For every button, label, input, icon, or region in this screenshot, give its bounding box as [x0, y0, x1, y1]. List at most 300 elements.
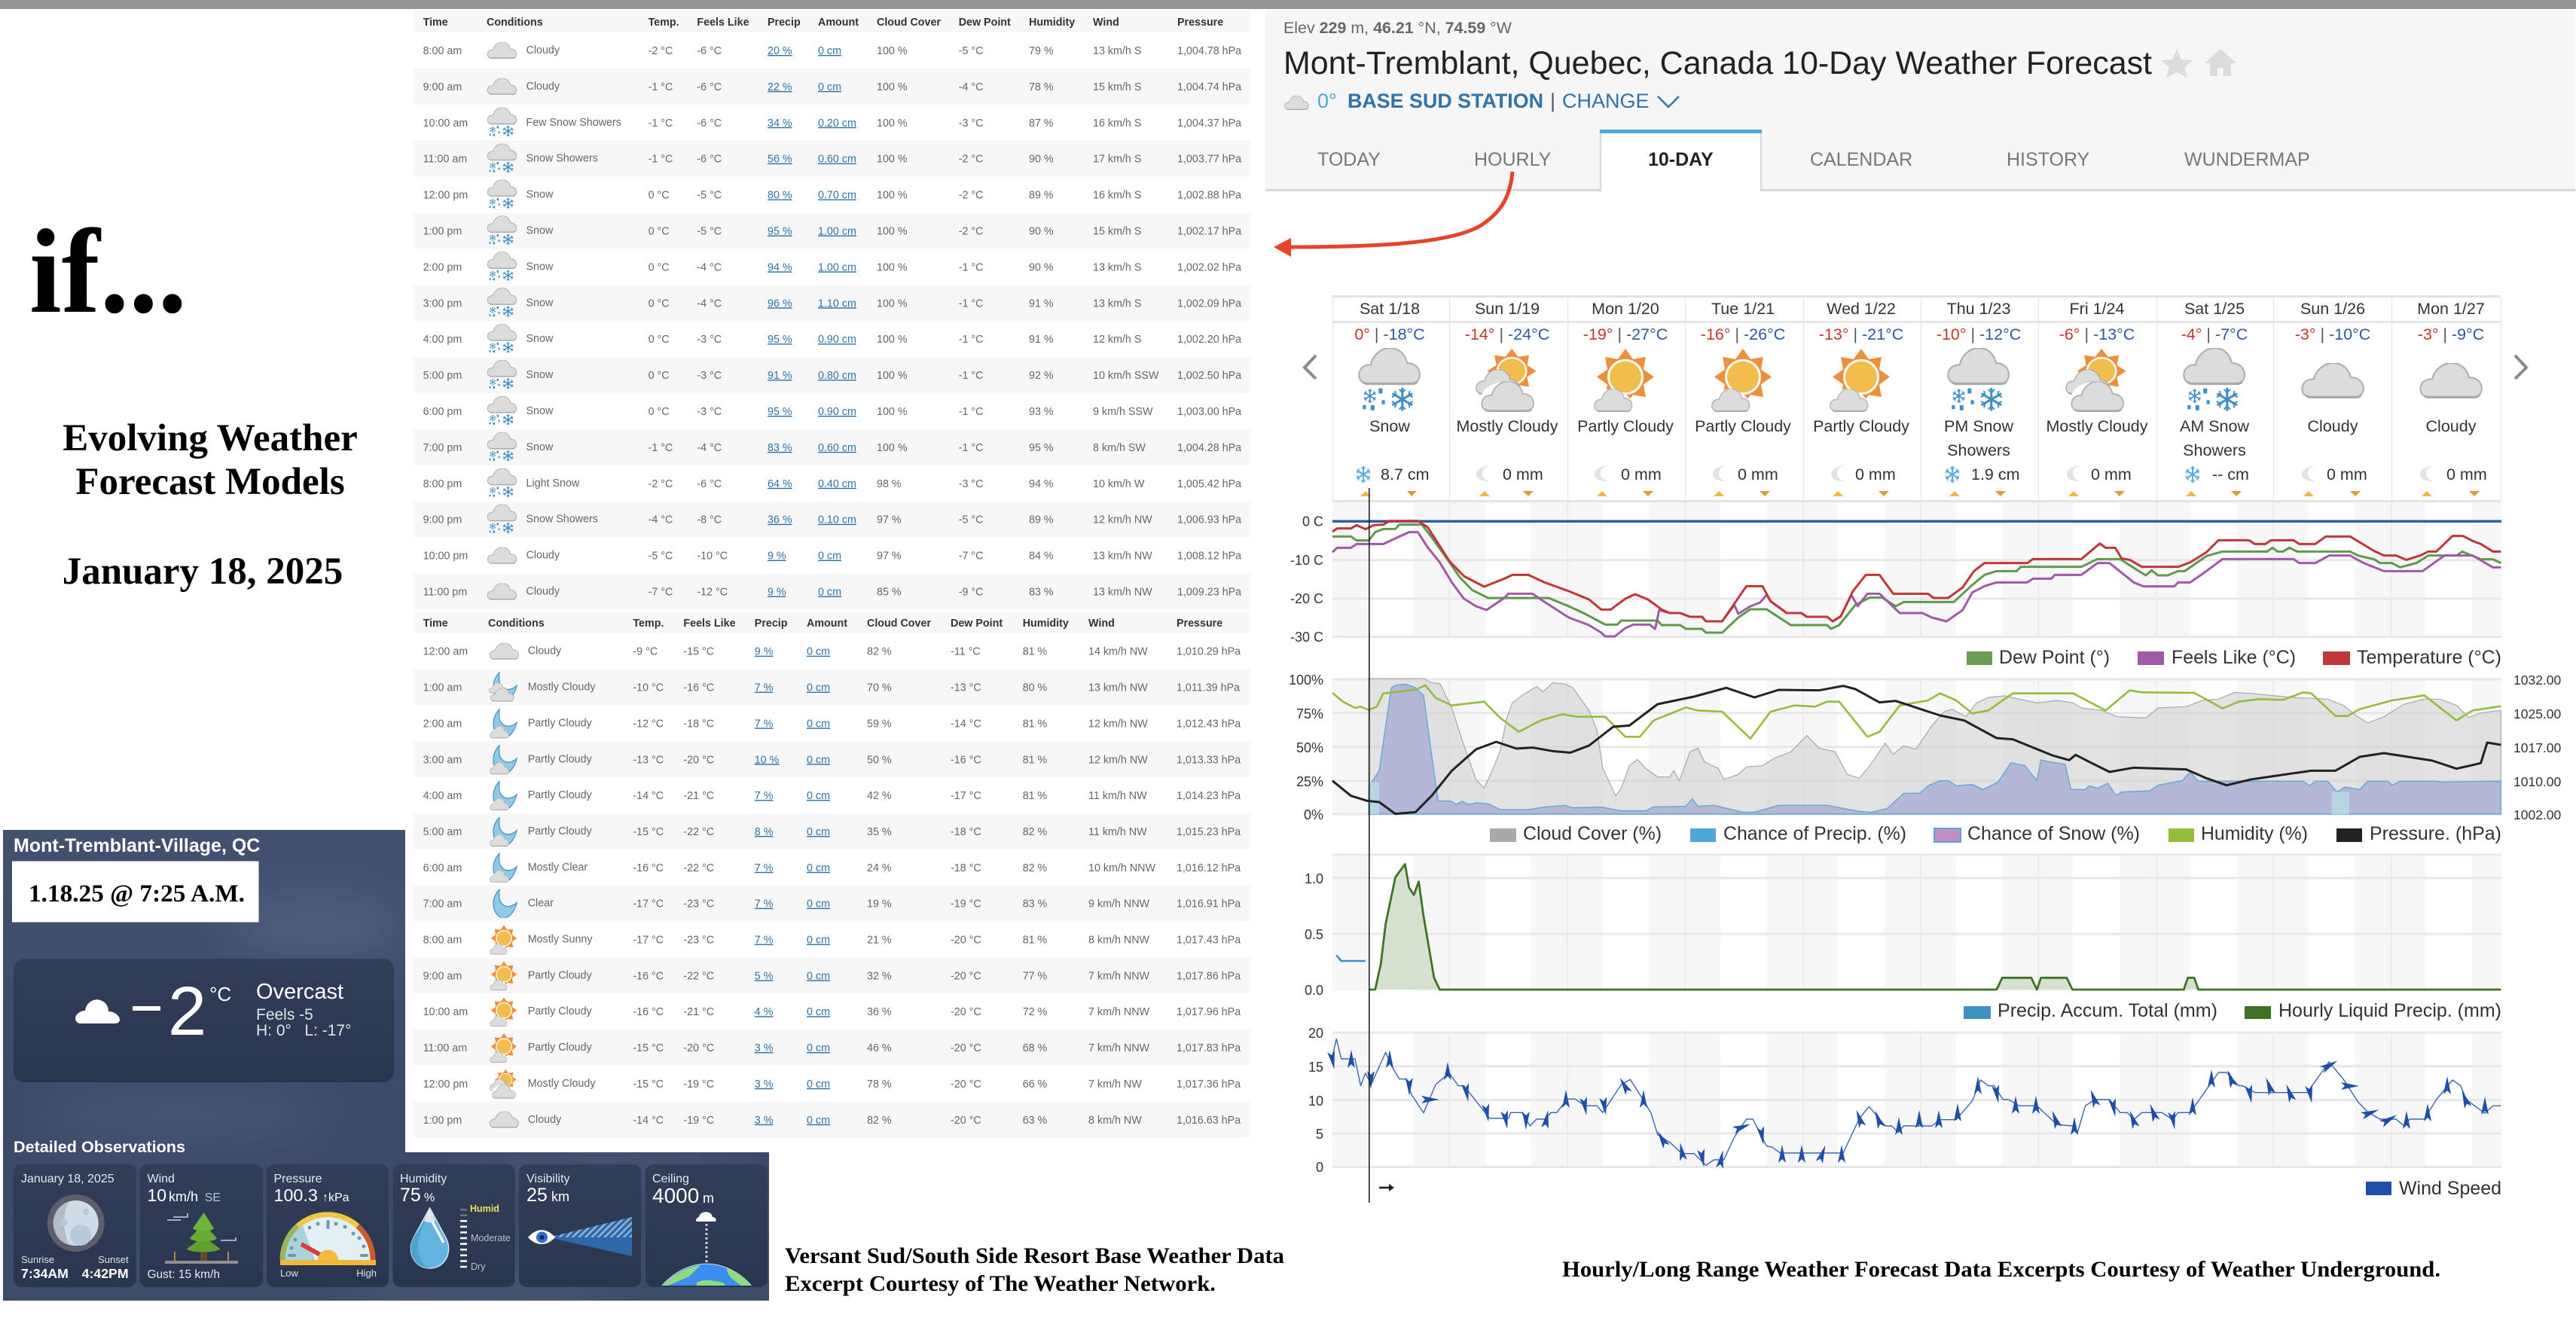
- row 10:00 pm: -10 °C: [697, 551, 728, 563]
- row 8:00 am: -17 °C: [633, 934, 664, 946]
- axis labels left: 25%: [1296, 774, 1323, 789]
- row 8:00 am: Mostly Sunny: [528, 934, 593, 946]
- row 4:00 pm: Snow: [526, 333, 554, 345]
- row 5:00 am: [414, 813, 1250, 850]
- forecast: Fri 1/24: -6° | -13°C: [2059, 325, 2135, 343]
- forecast: Fri 1/24: Mostly Cloudy: [2046, 417, 2148, 435]
- row 8:00 am: 8 km/h NNW: [1088, 934, 1150, 946]
- axis labels: 0.5: [1305, 927, 1323, 942]
- panel: current temperature card: [14, 959, 394, 1082]
- row 1:00 pm: [414, 212, 1250, 249]
- row 12:00 pm: -15 °C: [633, 1078, 664, 1091]
- row 3:00 pm: -1 °C: [959, 297, 983, 310]
- row 2:00 pm: 13 km/h S: [1093, 261, 1141, 273]
- card: humidity: Humidity: [400, 1173, 447, 1185]
- row 7:00 pm: 83 %: [768, 442, 792, 454]
- panel: hourly table today: [414, 11, 1250, 609]
- row 5:00 am: 0 cm: [807, 826, 830, 838]
- row 3:00 pm: 96 %: [768, 297, 792, 310]
- axis labels: 15: [1308, 1060, 1323, 1075]
- row 9:00 am: 100 %: [877, 81, 908, 93]
- row 1:00 pm: 0 °C: [649, 226, 670, 238]
- row 12:00 pm: Mostly Cloudy: [528, 1078, 596, 1090]
- legend: Hourly Liquid Precip. (mm): [2278, 1000, 2501, 1021]
- table header row: Dew Point: [951, 618, 1003, 630]
- row 10:00 am: 72 %: [1023, 1006, 1048, 1018]
- table header row: Pressure: [1177, 17, 1223, 29]
- row 12:00 am: -15 °C: [683, 646, 714, 658]
- row 5:00 pm: 1,002.50 hPa: [1177, 370, 1241, 382]
- row 7:00 pm: -1 °C: [959, 442, 983, 454]
- row 7:00 pm: 7:00 pm: [423, 442, 462, 454]
- row 1:00 pm: 63 %: [1023, 1115, 1048, 1127]
- row 3:00 am: -20 °C: [683, 754, 714, 766]
- row 1:00 am: [414, 670, 1250, 705]
- row 10:00 pm: -7 °C: [959, 551, 983, 563]
- card: date and moon: [14, 1164, 136, 1287]
- row 4:00 am: 81 %: [1023, 790, 1048, 802]
- row 5:00 pm: 92 %: [1029, 370, 1054, 382]
- forecast: Sat 1/18: [1354, 300, 1430, 496]
- row 9:00 am: 9:00 am: [423, 81, 462, 93]
- row 3:00 am: [414, 741, 1250, 777]
- row 11:00 am: [414, 141, 1250, 177]
- row 11:00 pm: 11:00 pm: [423, 586, 467, 598]
- icon: pressure gauge: [280, 1215, 376, 1265]
- row 4:00 pm: 95 %: [768, 334, 792, 346]
- temperature reading: °C: [209, 983, 231, 1005]
- row 8:00 am: 1,017.43 hPa: [1177, 934, 1241, 946]
- row 11:00 am: -6 °C: [697, 154, 722, 166]
- row 8:00 pm: 64 %: [768, 478, 792, 490]
- row 9:00 am: 32 %: [867, 970, 892, 982]
- caption: forecast data credit: Hourly/Long Range Weather Forecast Data Excerpts Courtesy of Weather Underground.: [1562, 1257, 2440, 1282]
- row 10:00 pm: 84 %: [1029, 551, 1054, 563]
- card: wind: Wind: [148, 1173, 175, 1185]
- row 1:00 am: 80 %: [1023, 682, 1048, 694]
- row 8:00 am: -23 °C: [683, 934, 714, 946]
- row 4:00 am: -14 °C: [633, 790, 664, 802]
- row 9:00 am: Cloudy: [526, 81, 560, 93]
- row 1:00 pm: 1:00 pm: [423, 1115, 462, 1127]
- panel: hourly table next day: [414, 612, 1250, 1138]
- row 5:00 pm: 0.80 cm: [818, 370, 856, 382]
- forecast: Wed 1/22: -13° | -21°C: [1819, 325, 1903, 343]
- row 4:00 am: 4:00 am: [423, 790, 462, 802]
- row 8:00 am: -20 °C: [951, 934, 981, 946]
- row 1:00 am: Mostly Cloudy: [528, 682, 596, 694]
- row 2:00 am: -14 °C: [951, 718, 981, 730]
- row 11:00 am: 46 %: [867, 1042, 892, 1054]
- table header row: [414, 612, 1250, 633]
- navigation tabs: HOURLY: [1474, 149, 1552, 170]
- icon: tree with wind: [165, 1213, 238, 1264]
- row 9:00 pm: 89 %: [1029, 514, 1054, 526]
- table header row: Conditions: [488, 618, 545, 630]
- row 11:00 am: -2 °C: [959, 154, 983, 166]
- row 7:00 pm: 1,004.28 hPa: [1177, 442, 1241, 454]
- forecast: Tue 1/21: 0 mm: [1738, 465, 1778, 483]
- row 5:00 pm: 0 °C: [649, 370, 670, 382]
- navigation tabs: TODAY: [1317, 149, 1381, 170]
- row 3:00 pm: 13 km/h S: [1093, 297, 1141, 310]
- row 6:00 pm: 1,003.00 hPa: [1177, 406, 1241, 418]
- card: humidity: Humid: [470, 1203, 499, 1214]
- axis labels: [1290, 514, 1323, 645]
- row 3:00 am: Partly Cloudy: [528, 753, 593, 765]
- current time marker line: [1369, 488, 1370, 1203]
- table header row: Precip: [768, 17, 801, 29]
- legend: Chance of Precip. (%): [1723, 823, 1906, 844]
- row 10:00 am: 36 %: [867, 1006, 892, 1018]
- forecast: Fri 1/24: Fri 1/24: [2070, 300, 2124, 318]
- row 8:00 am: 8:00 am: [423, 45, 462, 57]
- table header row: Wind: [1093, 17, 1119, 29]
- legend: Dew Point (°): [1999, 647, 2110, 668]
- row 2:00 am: -12 °C: [633, 718, 664, 730]
- row 7:00 am: 7 %: [755, 898, 774, 911]
- forecast: Wed 1/22: [1813, 300, 1909, 496]
- row 8:00 am: 13 km/h S: [1093, 45, 1141, 57]
- row 1:00 pm: -14 °C: [633, 1115, 664, 1127]
- row 2:00 pm: 1,002.02 hPa: [1177, 261, 1241, 273]
- row 8:00 am: 79 %: [1029, 45, 1054, 57]
- row 10:00 am: 0 cm: [807, 1006, 830, 1018]
- row 9:00 am: -22 °C: [683, 970, 714, 982]
- card: date and moon: 7:34AM: [21, 1266, 69, 1281]
- row 4:00 am: -17 °C: [951, 790, 981, 802]
- row 9:00 am: 0 cm: [807, 970, 830, 982]
- card: wind: 10: [148, 1185, 166, 1205]
- card: wind: km/h: [169, 1189, 198, 1204]
- row 9:00 pm: Snow Showers: [526, 514, 598, 526]
- row 5:00 am: Partly Cloudy: [528, 825, 593, 837]
- row 5:00 pm: -1 °C: [959, 370, 983, 382]
- row 11:00 am: -20 °C: [683, 1042, 714, 1054]
- card: pressure: High: [356, 1267, 377, 1279]
- row 11:00 am: 7 km/h NNW: [1088, 1042, 1150, 1054]
- row 11:00 am: 0.60 cm: [818, 154, 856, 166]
- condition text: [256, 980, 352, 1039]
- row 4:00 am: 11 km/h NW: [1088, 790, 1147, 802]
- row 7:00 am: [414, 886, 1250, 922]
- forecast: Sun 1/26: Sun 1/26: [2300, 300, 2365, 318]
- row 3:00 pm: [414, 285, 1250, 321]
- axis labels: -10 C: [1290, 553, 1323, 568]
- navigation tabs: [1317, 130, 2310, 191]
- row 9:00 am: 1,004.74 hPa: [1177, 81, 1241, 93]
- row 4:00 am: -21 °C: [683, 790, 714, 802]
- row 10:00 am: -21 °C: [683, 1006, 714, 1018]
- row 10:00 pm: 97 %: [877, 551, 902, 563]
- row 12:00 pm: 0.70 cm: [818, 190, 856, 202]
- row 5:00 pm: -3 °C: [697, 370, 722, 382]
- row 12:00 pm: -19 °C: [683, 1078, 714, 1091]
- chart: wind speed: [1308, 1026, 2501, 1199]
- row 9:00 am: 7 km/h NNW: [1088, 970, 1150, 982]
- row 7:00 pm: 0.60 cm: [818, 442, 856, 454]
- row 10:00 am: [423, 997, 1241, 1027]
- forecast: Mon 1/20: -19° | -27°C: [1583, 325, 1668, 343]
- row 9:00 am: -6 °C: [697, 81, 722, 93]
- card: pressure: 100.3: [274, 1185, 318, 1205]
- axis labels right: 1002.00: [2513, 807, 2562, 822]
- row 7:00 am: -19 °C: [951, 898, 981, 911]
- row 8:00 pm: 0.40 cm: [818, 478, 856, 490]
- row 10:00 am: -3 °C: [959, 117, 983, 130]
- title block: Evolving Weather: [63, 417, 358, 459]
- row 7:00 am: 7:00 am: [423, 898, 462, 911]
- forecast: Sat 1/25: Sat 1/25: [2184, 300, 2245, 318]
- row 2:00 pm: -1 °C: [959, 261, 983, 273]
- row 12:00 am: -9 °C: [633, 646, 658, 658]
- card: ceiling: [646, 1164, 768, 1287]
- row 9:00 am: [414, 957, 1250, 993]
- row 2:00 pm: [423, 252, 1241, 281]
- row 11:00 am: 100 %: [877, 154, 908, 166]
- axis labels left: 75%: [1296, 706, 1323, 721]
- forecast: Sat 1/25: -- cm: [2212, 465, 2249, 483]
- row 10:00 pm: [423, 548, 1241, 563]
- row 10:00 pm: 13 km/h NW: [1093, 551, 1152, 563]
- row 7:00 am: 83 %: [1023, 898, 1048, 911]
- row 4:00 am: 0 cm: [807, 790, 830, 802]
- forecast: Tue 1/21: [1695, 300, 1791, 496]
- row 11:00 am: Snow Showers: [526, 153, 598, 165]
- row 6:00 pm: 93 %: [1029, 406, 1054, 418]
- station selector: |: [1550, 90, 1555, 112]
- row 1:00 pm: -5 °C: [697, 226, 722, 238]
- forecast: Sat 1/25: [2180, 300, 2249, 496]
- row 12:00 pm: 3 %: [755, 1078, 774, 1091]
- row 11:00 am: -20 °C: [951, 1042, 981, 1054]
- row 1:00 am: -10 °C: [633, 682, 664, 694]
- row 9:00 pm: -4 °C: [649, 514, 673, 526]
- row 3:00 pm: 1,002.09 hPa: [1177, 297, 1241, 310]
- row 12:00 am: 1,010.29 hPa: [1177, 646, 1241, 658]
- forecast: Fri 1/24: [2046, 300, 2148, 496]
- row 4:00 pm: 91 %: [1029, 334, 1054, 346]
- row 4:00 pm: 1,002.20 hPa: [1177, 334, 1241, 346]
- forecast: Wed 1/22: Partly Cloudy: [1813, 417, 1909, 435]
- row 5:00 am: -15 °C: [633, 826, 664, 838]
- row 8:00 pm: 94 %: [1029, 478, 1054, 490]
- axis labels right: [2513, 673, 2562, 822]
- row 12:00 pm: 100 %: [877, 190, 908, 202]
- row 1:00 pm: -20 °C: [951, 1115, 981, 1127]
- table header row: Dew Point: [959, 17, 1011, 29]
- row 2:00 pm: 1.00 cm: [818, 261, 856, 273]
- row 3:00 pm: -4 °C: [697, 297, 722, 310]
- top grey bar: [0, 0, 2576, 9]
- row 11:00 am: 17 km/h S: [1093, 154, 1141, 166]
- row 10:00 am: 10:00 am: [423, 117, 468, 130]
- row 2:00 am: [423, 709, 1241, 738]
- row 4:00 pm: -1 °C: [959, 334, 983, 346]
- table header row: Cloud Cover: [867, 618, 931, 630]
- row 7:00 am: 9 km/h NNW: [1088, 898, 1150, 911]
- row 8:00 am: -6 °C: [697, 45, 722, 57]
- row 12:00 pm: -20 °C: [951, 1078, 981, 1091]
- row 4:00 am: 7 %: [755, 790, 774, 802]
- row 2:00 am: 1,012.43 hPa: [1177, 718, 1241, 730]
- card: humidity: Moderate: [471, 1233, 511, 1243]
- row 1:00 pm: -2 °C: [959, 226, 983, 238]
- row 5:00 am: -22 °C: [683, 826, 714, 838]
- table header row: Time: [423, 17, 448, 29]
- row 10:00 am: 100 %: [877, 117, 908, 130]
- row 11:00 am: [414, 1030, 1250, 1066]
- card: ceiling: m: [703, 1191, 714, 1206]
- card: wind: SE: [205, 1191, 221, 1204]
- navigation tabs: HISTORY: [2007, 149, 2090, 170]
- forecast: Mon 1/27: Mon 1/27: [2417, 300, 2485, 318]
- axis labels: -20 C: [1290, 591, 1323, 606]
- legend: Wind Speed: [2399, 1178, 2501, 1199]
- forecast: Sun 1/19: Sun 1/19: [1475, 300, 1540, 318]
- row 6:00 am: -22 °C: [683, 862, 714, 874]
- forecast: Mon 1/27: 0 mm: [2446, 465, 2487, 483]
- row 12:00 am: 12:00 am: [423, 646, 468, 658]
- row 11:00 pm: 85 %: [877, 586, 902, 598]
- row 3:00 am: 12 km/h NW: [1088, 754, 1148, 766]
- row 12:00 pm: 12:00 pm: [423, 190, 468, 202]
- card: wind: Gust: 15 km/h: [148, 1268, 220, 1281]
- row 3:00 am: 0 cm: [807, 754, 830, 766]
- row 7:00 am: -17 °C: [633, 898, 664, 911]
- row 8:00 am: -5 °C: [959, 45, 983, 57]
- row 8:00 pm: -3 °C: [959, 478, 983, 490]
- card: wind: [140, 1164, 263, 1287]
- row 8:00 am: 0 cm: [818, 45, 841, 57]
- row 1:00 pm: 3 %: [755, 1115, 774, 1127]
- station name: Mont-Tremblant-Village, QC: [14, 835, 260, 856]
- chart: temperature: [1290, 502, 2501, 668]
- card: pressure: ↑kPa: [322, 1191, 349, 1204]
- forecast: Sat 1/25: Showers: [2183, 441, 2246, 459]
- forecast: Sun 1/19: -14° | -24°C: [1465, 325, 1549, 343]
- row 10:00 am: -6 °C: [697, 117, 722, 130]
- row 10:00 am: 34 %: [768, 117, 792, 130]
- condition text: Overcast: [256, 980, 343, 1004]
- row 1:00 pm: Cloudy: [528, 1114, 562, 1126]
- row 1:00 am: 13 km/h NW: [1088, 682, 1148, 694]
- forecast: Fri 1/24: 0 mm: [2091, 465, 2132, 483]
- row 9:00 am: 5 %: [755, 970, 774, 982]
- forecast: Mon 1/20: [1577, 300, 1674, 496]
- row 9:00 pm: -8 °C: [697, 514, 722, 526]
- row 6:00 am: -16 °C: [633, 862, 664, 874]
- chart: cloud cover, precipitation, humidity, pressure: [1289, 673, 2562, 844]
- forecast: Tue 1/21: Partly Cloudy: [1695, 417, 1791, 435]
- row 12:00 am: 82 %: [867, 646, 892, 658]
- row 10:00 am: 16 km/h S: [1093, 117, 1141, 130]
- row 7:00 pm: -1 °C: [649, 442, 673, 454]
- legend: [1967, 647, 2501, 668]
- row 5:00 pm: 100 %: [877, 370, 908, 382]
- row 9:00 am: [414, 69, 1250, 105]
- row 12:00 pm: 0 cm: [807, 1078, 830, 1091]
- row 3:00 am: -16 °C: [951, 754, 981, 766]
- axis labels: 1.0: [1305, 871, 1323, 886]
- row 1:00 pm: 8 km/h NW: [1088, 1115, 1142, 1127]
- forecast: Sat 1/18: 0° | -18°C: [1354, 325, 1425, 343]
- legend: [1490, 823, 2501, 844]
- forecast: Tue 1/21: -16° | -26°C: [1701, 325, 1785, 343]
- row 1:00 pm: 90 %: [1029, 226, 1054, 238]
- row 12:00 pm: 89 %: [1029, 190, 1054, 202]
- card: humidity: %: [424, 1191, 435, 1204]
- card: visibility: km: [551, 1189, 569, 1204]
- row 1:00 am: 70 %: [867, 682, 892, 694]
- row 1:00 am: 1:00 am: [423, 682, 462, 694]
- row 8:00 pm: 10 km/h W: [1093, 478, 1145, 490]
- row 12:00 am: -11 °C: [951, 646, 981, 658]
- icon: moon: [47, 1194, 105, 1252]
- row 9:00 am: -1 °C: [649, 81, 673, 93]
- row 6:00 am: -18 °C: [951, 862, 981, 874]
- arrow: previous days: [1305, 355, 1316, 379]
- axis labels right: 1032.00: [2513, 673, 2562, 688]
- row 9:00 pm: 97 %: [877, 514, 902, 526]
- forecast: Sun 1/26: 0 mm: [2327, 465, 2367, 483]
- axis labels: 5: [1316, 1127, 1323, 1142]
- row 5:00 am: 11 km/h NW: [1088, 826, 1147, 838]
- card: pressure: Low: [280, 1267, 298, 1279]
- forecast: Sat 1/25: AM Snow: [2180, 417, 2249, 435]
- row 11:00 am: 68 %: [1023, 1042, 1048, 1054]
- card: humidity: [393, 1164, 515, 1287]
- forecast: Thu 1/23: 1.9 cm: [1971, 465, 2020, 483]
- date stamp box: [12, 862, 259, 922]
- row 10:00 pm: 0 cm: [818, 551, 841, 563]
- row 6:00 am: 7 %: [755, 862, 774, 874]
- row 5:00 am: 82 %: [1023, 826, 1048, 838]
- forecast: Mon 1/20: Mon 1/20: [1592, 300, 1659, 318]
- row 6:00 pm: 9 km/h SSW: [1093, 406, 1153, 418]
- axis labels: 0.0: [1305, 983, 1323, 998]
- row 11:00 am: 0 cm: [807, 1042, 830, 1054]
- row 9:00 pm: -5 °C: [959, 514, 983, 526]
- row 10:00 am: 87 %: [1029, 117, 1054, 130]
- panel: forecast page header: [1265, 11, 2575, 191]
- row 7:00 pm: [414, 429, 1250, 465]
- row 12:00 pm: [423, 180, 1241, 209]
- row 7:00 am: 19 %: [867, 898, 892, 911]
- card: date and moon: 4:42PM: [82, 1266, 129, 1281]
- row 1:00 pm: Snow: [526, 224, 554, 236]
- row 9:00 am: -16 °C: [633, 970, 664, 982]
- row 10:00 am: -1 °C: [649, 117, 673, 130]
- row 2:00 am: Partly Cloudy: [528, 717, 593, 729]
- card: visibility: 25: [526, 1185, 548, 1206]
- row 9:00 am: 15 km/h S: [1093, 81, 1141, 93]
- row 12:00 am: 81 %: [1023, 646, 1048, 658]
- row 9:00 pm: 36 %: [768, 514, 792, 526]
- row 8:00 am: 20 %: [768, 45, 792, 57]
- row 2:00 am: 12 km/h NW: [1088, 718, 1148, 730]
- row 6:00 am: 0 cm: [807, 862, 830, 874]
- row 10:00 am: 0.20 cm: [818, 117, 856, 130]
- row 10:00 pm: 1,008.12 hPa: [1177, 551, 1241, 563]
- table header row: Amount: [807, 618, 847, 630]
- row 11:00 am: 11:00 am: [423, 1042, 467, 1054]
- axis labels left: 50%: [1296, 740, 1323, 755]
- row 11:00 am: 1,017.83 hPa: [1177, 1042, 1241, 1054]
- row 8:00 am: 81 %: [1023, 934, 1048, 946]
- row 8:00 pm: 8:00 pm: [423, 478, 462, 490]
- date: January 18, 2025: [63, 551, 343, 593]
